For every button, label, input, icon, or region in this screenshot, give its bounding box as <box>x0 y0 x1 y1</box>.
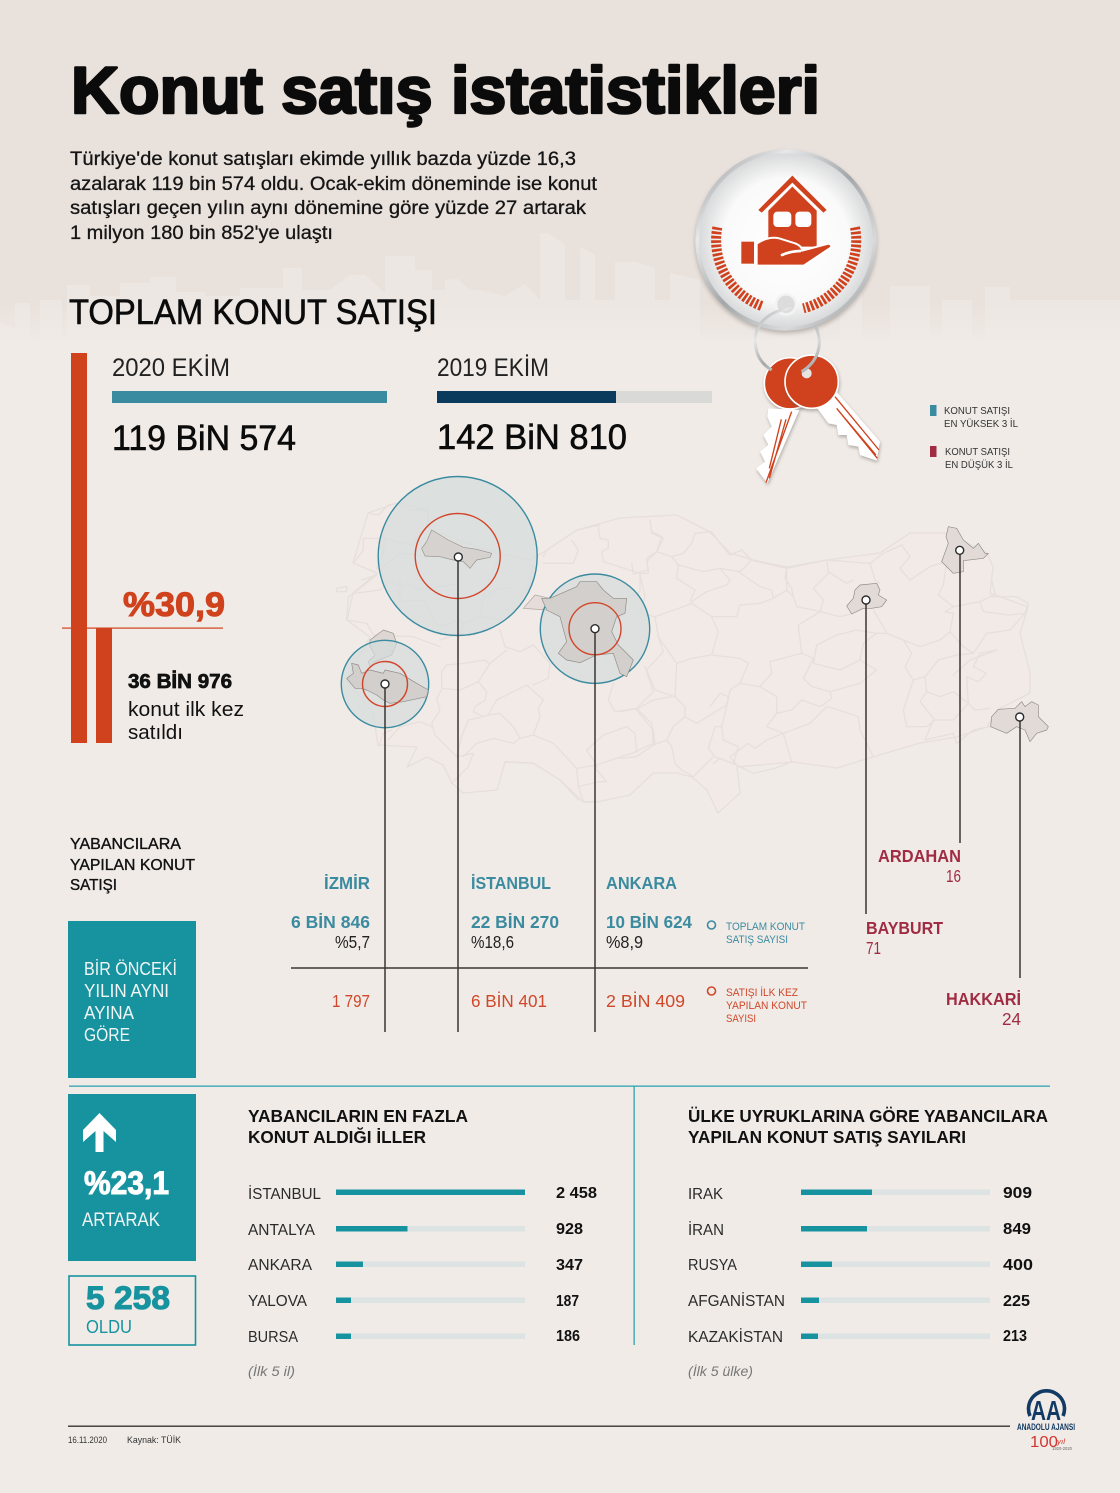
intro text: satışları geçen yılın aynı dönemine göre yüzde 27 artarak <box>70 197 586 219</box>
gauge ticks <box>716 227 856 308</box>
province borders: south-west <box>378 630 653 802</box>
map legend: KONUT SATIŞI <box>945 446 1010 458</box>
header band <box>0 0 1120 340</box>
legend: satışı ilk kez yapılan konut sayısı: SAYISI <box>726 1013 756 1025</box>
first sale text: konut ilk kez <box>128 698 244 721</box>
data: bayburt <box>866 918 943 958</box>
row: ankara: 347 <box>556 1257 583 1274</box>
panel: 2020 ekim: 119 BiN 574 <box>112 419 296 458</box>
row: bursa: BURSA <box>248 1329 299 1346</box>
row: antalya: ANTALYA <box>248 1222 316 1239</box>
row: afganistan <box>688 1292 1030 1310</box>
title: Konut satış istatistikleri <box>71 53 820 127</box>
legend: toplam konut satış sayısı: SATIŞ SAYISI <box>726 934 788 946</box>
map legend: KONUT SATIŞI <box>944 405 1010 417</box>
data: istanbul: %18,6 <box>471 932 514 952</box>
row: yalova: YALOVA <box>248 1293 308 1310</box>
data: bayburt: BAYBURT <box>866 918 943 938</box>
data: ardahan <box>878 846 961 886</box>
key ring <box>755 308 819 372</box>
data: izmir: 6 BİN 846 <box>291 912 370 932</box>
panel: 2019 ekim <box>437 353 712 457</box>
intro text <box>70 148 598 244</box>
data: izmir: İZMİR <box>324 873 370 893</box>
row: yalova <box>248 1293 579 1310</box>
row: kazakistan: KAZAKİSTAN <box>688 1328 783 1346</box>
row: bursa <box>248 1328 580 1346</box>
panel: bir önceki yılın aynı ayına göre: AYINA <box>84 1003 134 1023</box>
data: izmir: 1 797 <box>332 991 370 1011</box>
first sale text: 36 BİN 976 <box>128 670 232 693</box>
data: bayburt: 71 <box>866 938 881 958</box>
bubble: izmir <box>341 630 429 728</box>
row: antalya: 928 <box>556 1221 583 1238</box>
legend: satışı ilk kez yapılan konut sayısı: SATIŞI İLK KEZ <box>726 986 798 999</box>
intro text: Türkiye'de konut satışları ekimde yıllık bazda yüzde 16,3 <box>70 148 576 170</box>
bar: toplam satış <box>71 353 87 743</box>
logo: anadolu ajansı: ANADOLU AJANSI <box>1017 1422 1075 1432</box>
note: (İlk 5 il) <box>248 1363 295 1379</box>
row: afganistan: 225 <box>1003 1293 1030 1310</box>
footer: date and source: 16.11.2020 <box>68 1435 107 1445</box>
data: istanbul <box>471 873 559 1011</box>
row: ankara <box>248 1257 583 1274</box>
fob disc <box>697 151 875 329</box>
row: ankara: ANKARA <box>248 1257 313 1274</box>
row: afganistan: AFGANİSTAN <box>688 1292 785 1310</box>
panel: artış oranı: ARTARAK <box>82 1210 160 1231</box>
logo: anadolu ajansı: 100 <box>1030 1434 1058 1451</box>
map legend: EN DÜŞÜK 3 İL <box>945 458 1013 471</box>
data: istanbul: 6 BİN 401 <box>471 991 547 1011</box>
chart heading: YAPILAN KONUT SATIŞ SAYILARI <box>688 1127 966 1147</box>
row: iran: İRAN <box>688 1221 724 1239</box>
panel: 2019 ekim: 142 BiN 810 <box>437 418 627 457</box>
left label: yabancılara yapılan konut satışı <box>70 836 195 894</box>
icon: house <box>758 176 827 247</box>
intro text: azalarak 119 bin 574 oldu. Ocak-ekim döneminde ise konut <box>70 173 598 195</box>
panel: ilk kez satılan konut oranı <box>62 353 244 744</box>
row: kazakistan: 213 <box>1003 1328 1027 1345</box>
logo: anadolu ajansı: AA <box>1031 1395 1061 1426</box>
row: istanbul <box>248 1185 597 1203</box>
row: antalya <box>248 1221 583 1239</box>
fob hole <box>776 294 796 314</box>
panel: toplam yabancı satış <box>69 1276 196 1345</box>
row: yalova: 187 <box>556 1293 579 1310</box>
first sale text: satıldı <box>128 721 183 744</box>
percentage: %30,9 <box>123 586 225 624</box>
data: izmir: %5,7 <box>335 932 370 952</box>
pin lines <box>291 550 1020 1032</box>
data: ankara: ANKARA <box>606 873 677 893</box>
data: ardahan: ARDAHAN <box>878 846 961 866</box>
section heading: toplam konut satışı: TOPLAM KONUT SATIŞI <box>69 293 437 332</box>
panel: artış oranı: %23,1 <box>84 1165 169 1201</box>
chart heading: KONUT ALDIĞI İLLER <box>248 1126 426 1147</box>
province borders: west <box>337 503 663 647</box>
map legend: EN YÜKSEK 3 İL <box>944 417 1018 430</box>
panel: artış oranı <box>68 1094 196 1261</box>
chart: yabancıların en fazla konut aldığı iller <box>248 1106 597 1379</box>
map legend <box>930 405 1018 471</box>
left label: yabancılara yapılan konut satışı: SATIŞI <box>70 877 117 894</box>
chart heading <box>248 1106 468 1147</box>
data: hakkari: 24 <box>1002 1009 1021 1029</box>
intro text: 1 milyon 180 bin 852'ye ulaştı <box>70 222 333 244</box>
data: hakkari <box>946 989 1021 1029</box>
panel: toplam yabancı satış: OLDU <box>86 1317 132 1337</box>
data: ankara: 2 BİN 409 <box>606 991 685 1011</box>
first sale text <box>128 670 244 744</box>
logo: anadolu ajansı: yıl <box>1056 1439 1066 1446</box>
data: hakkari: HAKKARİ <box>946 989 1021 1009</box>
footer: date and source: Kaynak: TÜİK <box>127 1435 181 1445</box>
row: irak: IRAK <box>688 1186 724 1203</box>
legend: toplam konut satış sayısı <box>708 921 805 946</box>
icon: hand <box>741 238 831 266</box>
skyline silhouette <box>0 233 1120 340</box>
bar: ilk kez satış <box>96 628 112 743</box>
panel: 2020 ekim <box>112 353 387 458</box>
row: iran <box>688 1221 1031 1239</box>
bubble: ankara <box>523 574 650 683</box>
row: rusya <box>688 1257 1033 1274</box>
data: istanbul: 22 BİN 270 <box>471 912 559 932</box>
data: ankara: %8,9 <box>606 932 643 952</box>
right key <box>785 355 880 461</box>
map of Turkey <box>337 503 1030 813</box>
row: iran: 849 <box>1003 1221 1031 1238</box>
row: istanbul: İSTANBUL <box>248 1185 321 1203</box>
row: rusya: RUSYA <box>688 1257 738 1274</box>
row: irak: 909 <box>1003 1185 1032 1202</box>
footer: date and source <box>68 1435 181 1445</box>
logo: anadolu ajansı: 1920-2020 <box>1052 1446 1072 1451</box>
logo: anadolu ajansı <box>1017 1391 1075 1451</box>
province borders: east <box>620 520 1028 777</box>
left label: yabancılara yapılan konut satışı: YAPILAN KONUT <box>70 857 195 874</box>
panel: bir önceki yılın aynı ayına göre: GÖRE <box>84 1025 130 1045</box>
icon: key fob with house and keys <box>697 151 880 483</box>
data: ardahan: 16 <box>946 866 961 886</box>
row: irak <box>688 1185 1032 1203</box>
skyline lower fade <box>0 305 1120 345</box>
chart: ülke uyruklarına göre yabancılara yapılan konut satış sayıları <box>688 1106 1048 1379</box>
row: istanbul: 2 458 <box>556 1185 597 1202</box>
data: istanbul: İSTANBUL <box>471 873 551 893</box>
left key <box>756 358 816 483</box>
row: rusya: 400 <box>1003 1257 1033 1274</box>
provinces: lowest sales <box>847 527 1048 742</box>
panel: 2020 ekim: 2020 EKİM <box>112 353 230 382</box>
row: bursa: 186 <box>556 1328 580 1345</box>
icon: up arrow <box>83 1113 116 1152</box>
row: kazakistan <box>688 1328 1027 1346</box>
data: ankara <box>606 873 692 1011</box>
chart heading <box>688 1106 1048 1147</box>
legend: satışı ilk kez yapılan konut sayısı: YAPILAN KONUT <box>726 1000 807 1012</box>
panel: 2019 ekim: 2019 EKİM <box>437 353 549 382</box>
pins <box>381 546 1024 721</box>
note: (İlk 5 ülke) <box>688 1363 753 1379</box>
legend: toplam konut satış sayısı: TOPLAM KONUT <box>726 921 805 933</box>
chart heading: YABANCILARIN EN FAZLA <box>248 1106 468 1126</box>
data: izmir <box>291 873 370 1011</box>
panel: bir önceki yılın aynı ayına göre <box>68 921 196 1078</box>
panel: bir önceki yılın aynı ayına göre: BİR ÖNCEKİ <box>84 959 177 979</box>
chart heading: ÜLKE UYRUKLARINA GÖRE YABANCILARA <box>688 1106 1048 1126</box>
panel: bir önceki yılın aynı ayına göre: YILIN AYNI <box>84 981 169 1001</box>
legend: satışı ilk kez yapılan konut sayısı <box>708 986 807 1025</box>
left label: yabancılara yapılan konut satışı: YABANCILARA <box>70 836 181 853</box>
data: ankara: 10 BİN 624 <box>606 912 692 932</box>
bubble: istanbul <box>378 476 537 636</box>
panel: toplam yabancı satış: 5 258 <box>86 1280 170 1316</box>
